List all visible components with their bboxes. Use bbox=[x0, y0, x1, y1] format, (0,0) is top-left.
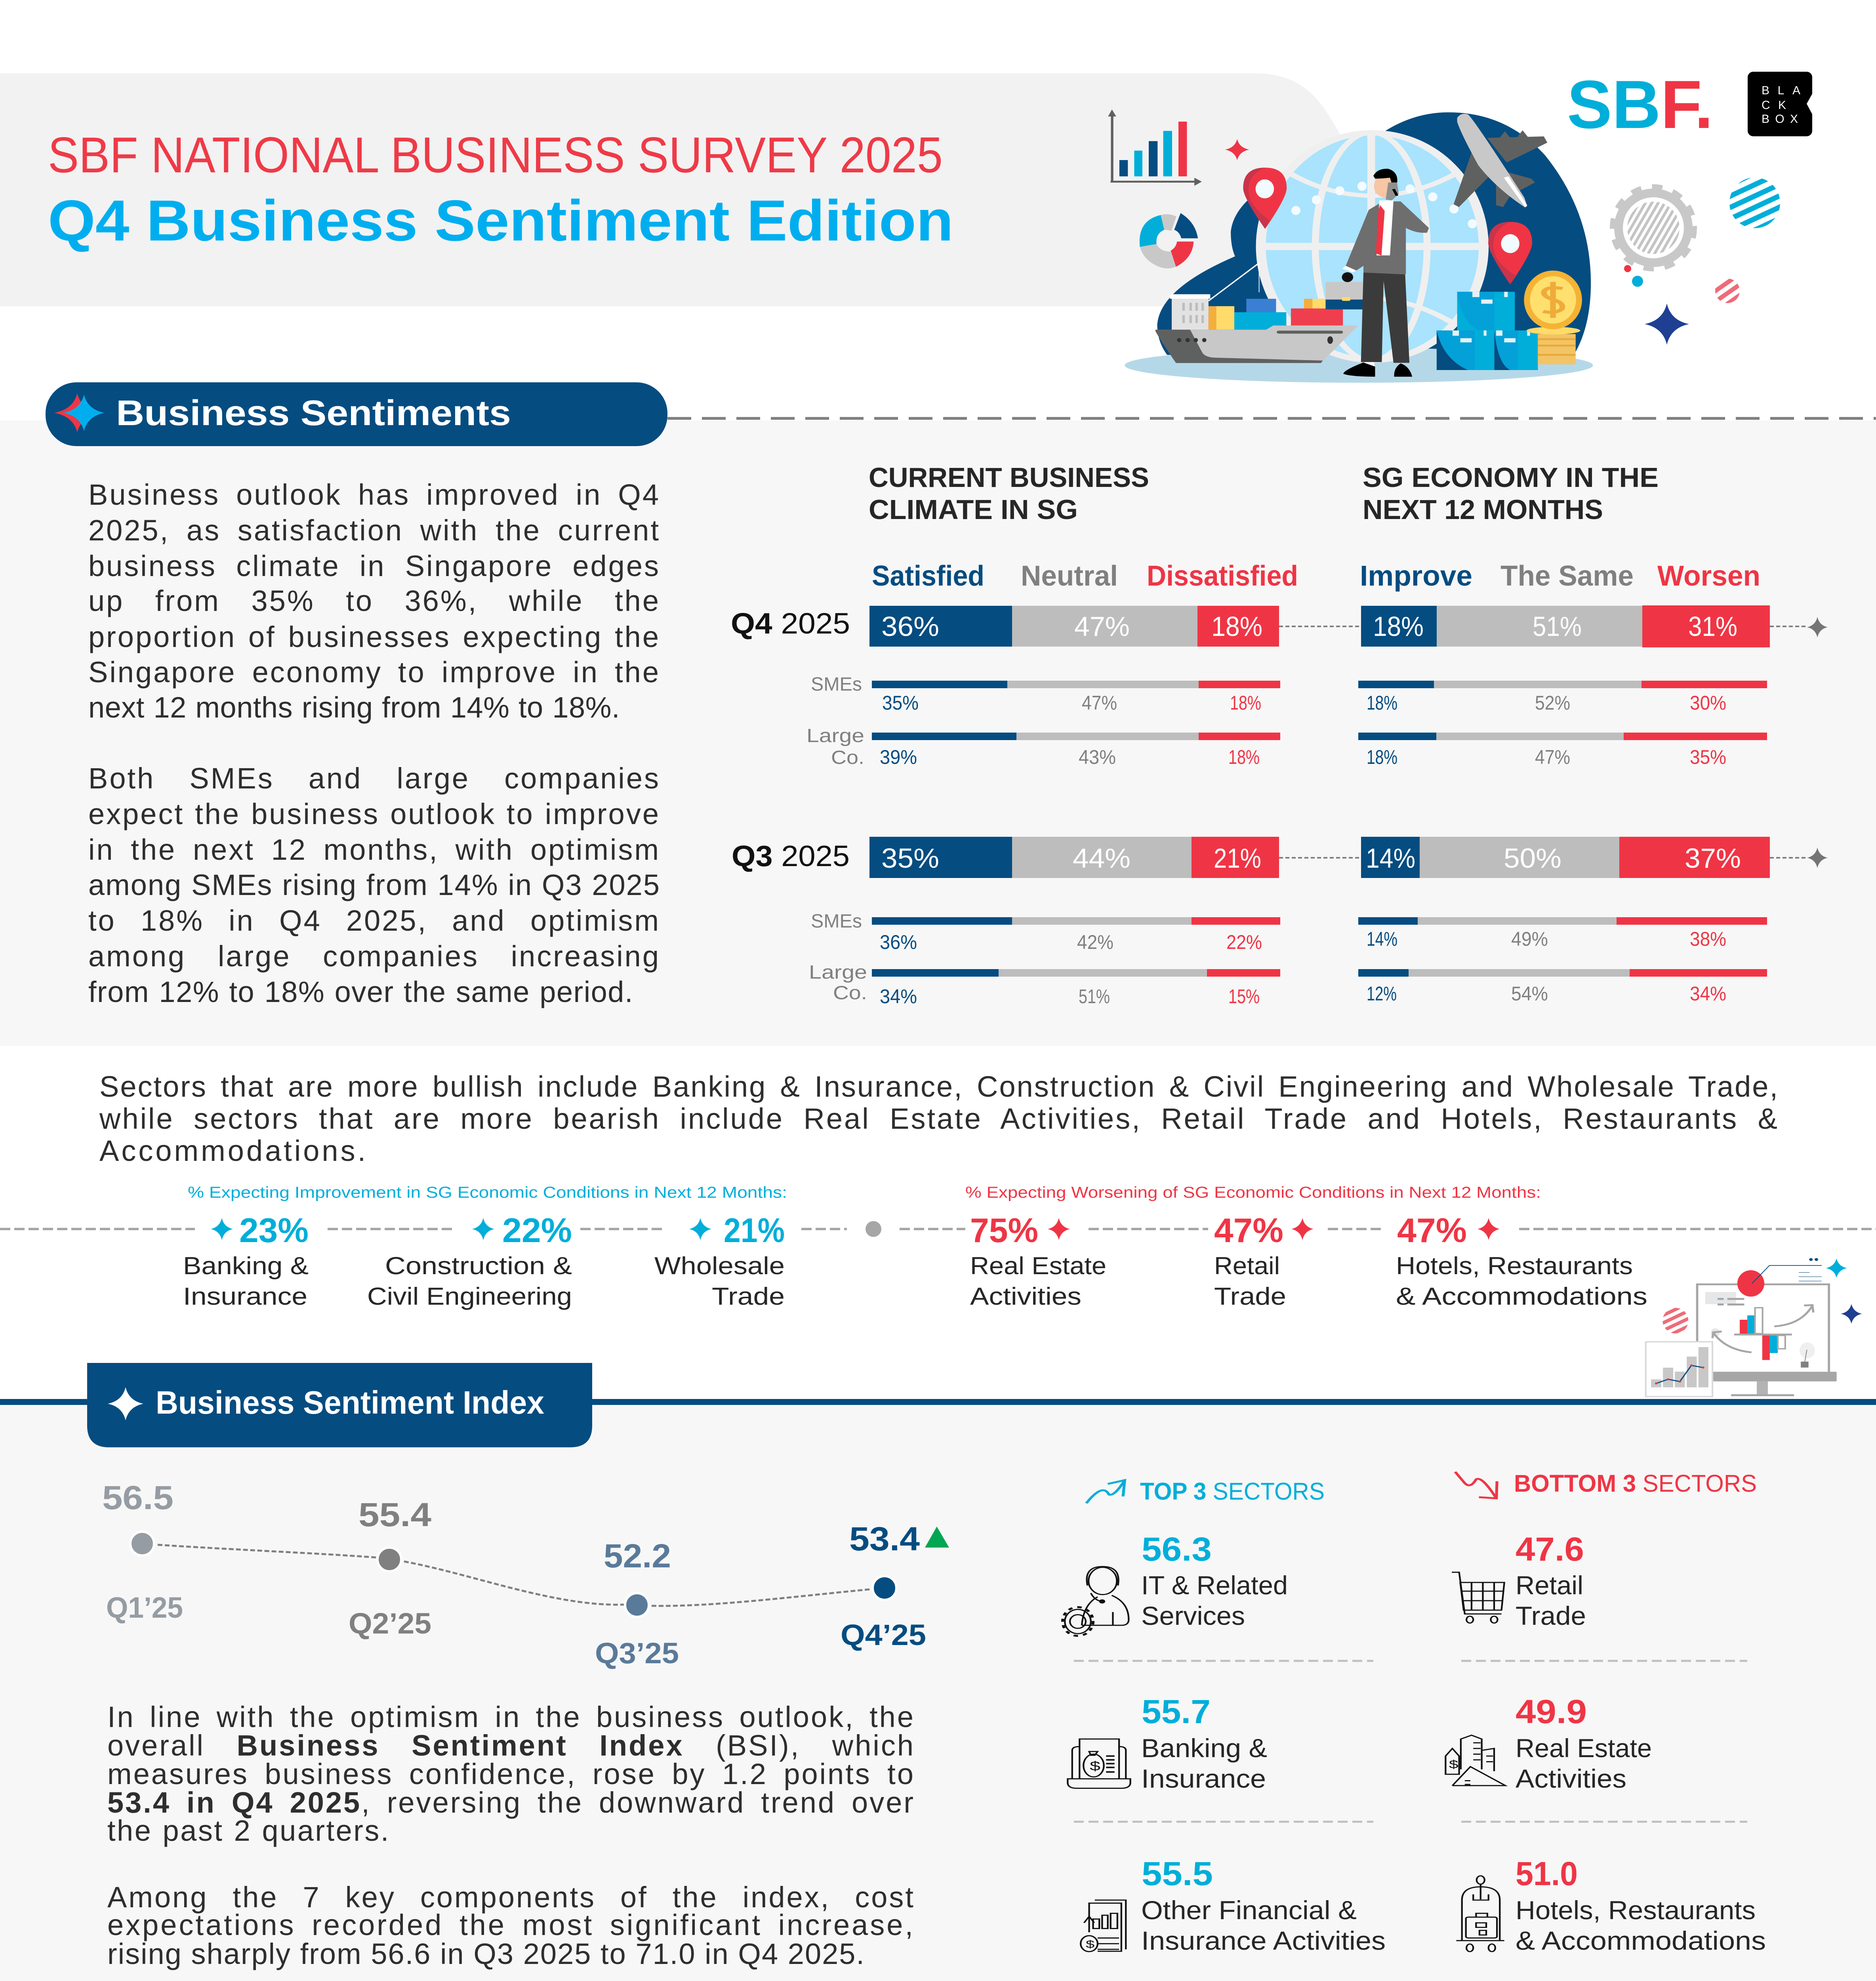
stat: Real Estate Activities: Activities bbox=[970, 1283, 1081, 1310]
row: Q3 Large Co.: 12% bbox=[1367, 983, 1397, 1005]
gear icon bbox=[1613, 187, 1694, 268]
bottom 3 sectors: 47.6 bbox=[1516, 1531, 1584, 1568]
bar: Q3 economy: 50% bbox=[1504, 843, 1561, 874]
icon: IT support bbox=[1063, 1567, 1129, 1636]
globe bbox=[1261, 133, 1485, 361]
bar: Q3 economy bbox=[1361, 837, 1770, 878]
legend: economy: The Same bbox=[1500, 560, 1634, 592]
column heading: current business climate: CLIMATE IN SG bbox=[869, 494, 1078, 525]
section background: business sentiments bbox=[0, 420, 1876, 1046]
title: SBF NATIONAL BUSINESS SURVEY 2025 bbox=[48, 127, 943, 183]
stat: Construction & Civil Engineering bbox=[367, 1212, 572, 1310]
hatched ball: cyan bbox=[1729, 177, 1780, 228]
row: Q4 SMEs: 47% bbox=[1082, 692, 1117, 714]
bar: Q3 current climate: 44% bbox=[1073, 843, 1131, 874]
row: Q3 SMEs: 22% bbox=[1226, 931, 1262, 953]
ground bbox=[1125, 348, 1593, 383]
legend: economy: Improve bbox=[1360, 560, 1472, 592]
row: Q3 Large Co.: Co. bbox=[833, 983, 867, 1004]
sparkle: navy bbox=[1645, 303, 1689, 345]
bar: Q4 current climate: 18% bbox=[1211, 611, 1262, 642]
connector and sparkle: Q3 bbox=[1770, 847, 1828, 868]
row: Q3 SMEs: 49% bbox=[1511, 928, 1548, 950]
top 3 sectors: 55.7 bbox=[1142, 1693, 1211, 1730]
dot: red bbox=[1624, 265, 1631, 272]
plane bbox=[1454, 114, 1547, 208]
stat: Wholesale Trade: Trade bbox=[712, 1283, 785, 1310]
briefcase bbox=[1325, 282, 1363, 309]
location pin left bbox=[1243, 168, 1287, 229]
stat: Retail Trade: 47% bbox=[1214, 1212, 1283, 1250]
cargo boxes bbox=[1437, 292, 1538, 370]
bottom 3 sectors: 49.9 bbox=[1516, 1693, 1587, 1730]
logo: Black Box: BLA bbox=[1762, 84, 1800, 97]
line chart: Business Sentiment Index: 56.5 bbox=[102, 1479, 173, 1516]
top 3 sectors: 56.3 bbox=[1142, 1531, 1212, 1568]
row: Q4 Large Co. bbox=[806, 725, 1767, 768]
row: Q4 Large Co.: 47% bbox=[1535, 746, 1570, 768]
top 3 sectors bbox=[1063, 1478, 1386, 1955]
row: Q4 SMEs bbox=[811, 674, 1767, 714]
bar: Q4 economy bbox=[1361, 605, 1770, 647]
column heading: SG economy bbox=[1363, 462, 1659, 525]
text block: BSI commentary: 53.4 in Q4 2025, reversing the downward trend over bbox=[107, 1786, 915, 1819]
row: Q3 SMEs: 38% bbox=[1690, 928, 1726, 950]
row: Q4 Large Co.: 39% bbox=[880, 746, 917, 768]
logo: SBF: SBF. bbox=[1567, 67, 1713, 143]
icon: banking laptop: $ bbox=[1090, 1759, 1100, 1773]
bottom 3 sectors: Trade bbox=[1516, 1601, 1586, 1630]
bar: Q3 current climate: 21% bbox=[1214, 843, 1261, 874]
row: Q3 SMEs: 36% bbox=[880, 931, 917, 953]
legend: current climate: Satisfied bbox=[872, 560, 984, 592]
text block: BSI commentary: overall Business Sentiment Index (BSI), which bbox=[107, 1729, 915, 1762]
connector and sparkle: Q4 bbox=[1770, 617, 1828, 637]
legend: current climate: Neutral bbox=[1021, 560, 1118, 592]
row label: Q3 2025: Q3 2025 bbox=[732, 840, 850, 872]
row: Q4 Large Co.: 18% bbox=[1367, 746, 1397, 768]
line chart: Business Sentiment Index: 55.4 bbox=[358, 1496, 431, 1533]
text block: business outlook: expect the business outlook to improve bbox=[88, 798, 660, 830]
text block: business outlook: next 12 months rising from 14% to 18%. bbox=[88, 691, 620, 724]
stat: Retail Trade bbox=[1214, 1212, 1314, 1310]
stat: Real Estate Activities bbox=[970, 1212, 1106, 1310]
navy divider line bbox=[0, 1399, 1876, 1405]
logo: Black Box: CK bbox=[1762, 99, 1786, 112]
text block: business outlook: Both SMEs and large companies bbox=[88, 762, 660, 795]
line chart: Business Sentiment Index: Q1’25 bbox=[106, 1591, 183, 1624]
row: Q3 SMEs: SMEs bbox=[811, 911, 862, 932]
bottom 3 sectors: Retail bbox=[1516, 1571, 1583, 1600]
top 3 sectors: Insurance Activities bbox=[1141, 1926, 1386, 1955]
red sparkle bbox=[1225, 139, 1249, 160]
bar: Q4 economy: 51% bbox=[1533, 611, 1582, 642]
line chart: Business Sentiment Index: Q2’25 bbox=[349, 1607, 431, 1640]
hatched ball: red bbox=[1715, 279, 1740, 303]
bar: Q4 current climate: 47% bbox=[1074, 611, 1130, 642]
row: Q4 SMEs: 35% bbox=[882, 692, 919, 714]
top 3 sectors: Services bbox=[1141, 1601, 1245, 1630]
line chart: Business Sentiment Index: 53.4 bbox=[849, 1520, 920, 1557]
bottom 3 sectors: & Accommodations bbox=[1516, 1926, 1766, 1955]
top 3 sectors: Other Financial & bbox=[1141, 1895, 1357, 1925]
connector: Q4 bbox=[1279, 626, 1361, 627]
text block: bullish and bearish sectors bbox=[99, 1067, 1779, 1171]
bottom 3 sectors: Activities bbox=[1516, 1764, 1626, 1793]
text block: bullish and bearish sectors: while sectors that are more bearish include Real Estate Activities, Retail Trade and Hotels, Restaurants & bbox=[99, 1102, 1779, 1135]
navy backdrop bbox=[1157, 112, 1591, 355]
header panel bbox=[0, 73, 1355, 306]
legend: economy bbox=[1360, 560, 1760, 592]
text block: bullish and bearish sectors: Accommodations. bbox=[99, 1134, 368, 1167]
gold coins bbox=[1524, 271, 1582, 365]
bottom 3 sectors: 51.0 bbox=[1516, 1855, 1578, 1892]
bar: Q4 current climate bbox=[869, 606, 1279, 647]
stat: Hotels, Restaurants & Accommodations: Hotels, Restaurants bbox=[1396, 1252, 1633, 1280]
subheading: improvement: % Expecting Improvement in SG Economic Conditions in Next 12 Months: bbox=[188, 1184, 787, 1201]
bar: Q3 current climate bbox=[869, 837, 1279, 878]
column heading: current business climate: CURRENT BUSINESS bbox=[869, 462, 1149, 493]
row: Q3 Large Co.: 54% bbox=[1511, 983, 1548, 1005]
stat: Construction & Civil Engineering: 22% bbox=[502, 1212, 572, 1250]
legend: current climate bbox=[872, 560, 1298, 592]
bar chart icon bbox=[1108, 109, 1202, 186]
text block: business outlook: from 12% to 18% over the same period. bbox=[88, 975, 633, 1008]
logo: Black Box: BOX bbox=[1762, 113, 1798, 126]
stat: Construction & Civil Engineering: Construction & bbox=[385, 1252, 572, 1280]
icon: trending down bbox=[1455, 1472, 1497, 1498]
column heading: SG economy: SG ECONOMY IN THE bbox=[1363, 462, 1659, 493]
icon: trending up bbox=[1086, 1480, 1125, 1503]
top 3 sectors: Insurance bbox=[1141, 1764, 1266, 1793]
title bbox=[48, 127, 953, 253]
text block: BSI commentary: expectations recorded the most significant increase, bbox=[107, 1908, 915, 1941]
legend: current climate: Dissatisfied bbox=[1147, 560, 1298, 592]
line chart: Business Sentiment Index: Q4’25 bbox=[841, 1618, 926, 1651]
text block: business outlook bbox=[88, 475, 660, 1012]
icon: banking laptop bbox=[1068, 1739, 1131, 1788]
connector: Q3 bbox=[1279, 857, 1361, 859]
bar: Q4 economy: 18% bbox=[1373, 611, 1424, 642]
text block: business outlook: Singapore economy to improve in the bbox=[88, 656, 660, 689]
bar: Q4 economy: 31% bbox=[1688, 611, 1737, 642]
row: Q4 Large Co.: 43% bbox=[1079, 746, 1116, 768]
stat: Hotels, Restaurants & Accommodations bbox=[1396, 1212, 1647, 1310]
stat: Banking & Insurance: 23% bbox=[239, 1212, 309, 1250]
row: Q3 Large Co.: Large bbox=[809, 962, 867, 983]
top 3 sectors: Banking & bbox=[1141, 1733, 1267, 1763]
dashed timeline bbox=[0, 1228, 1876, 1230]
icon: real estate bbox=[1445, 1735, 1506, 1786]
row: Q3 SMEs: 42% bbox=[1077, 931, 1113, 953]
top 3 sectors: IT & Related bbox=[1141, 1571, 1288, 1600]
row: Q4 Large Co.: Large bbox=[806, 725, 864, 746]
row: Q3 Large Co.: 15% bbox=[1228, 985, 1260, 1008]
bottom 3 sectors: Hotels, Restaurants bbox=[1516, 1895, 1756, 1925]
icon: financial document: $ bbox=[1086, 1939, 1094, 1950]
stat: Banking & Insurance: Banking & bbox=[183, 1252, 309, 1280]
row: Q3 SMEs: 14% bbox=[1367, 928, 1397, 950]
text block: BSI commentary: In line with the optimism in the business outlook, the bbox=[107, 1700, 915, 1733]
row: Q3 Large Co.: 34% bbox=[880, 985, 917, 1008]
top 3 sectors: 55.5 bbox=[1142, 1855, 1213, 1892]
stat: Retail Trade: Retail bbox=[1214, 1252, 1280, 1280]
stat: Banking & Insurance: Insurance bbox=[183, 1283, 307, 1310]
heading: Business Sentiments bbox=[46, 382, 667, 446]
stat: Real Estate Activities: Real Estate bbox=[970, 1252, 1106, 1280]
text block: business outlook: proportion of businesses expecting the bbox=[88, 620, 660, 653]
title: Q4 Business Sentiment Edition bbox=[48, 188, 953, 253]
stat: Hotels, Restaurants & Accommodations: 47% bbox=[1397, 1212, 1467, 1250]
line chart: Business Sentiment Index bbox=[102, 1479, 949, 1670]
row: Q3 SMEs bbox=[811, 911, 1767, 953]
heading: Business Sentiment Index: Business Sentiment Index bbox=[156, 1385, 544, 1421]
bottom 3 sectors: BOTTOM 3 SECTORS bbox=[1514, 1470, 1757, 1497]
location pin right bbox=[1488, 222, 1532, 284]
row: Q4 SMEs: 18% bbox=[1367, 692, 1397, 714]
icon: financial document bbox=[1081, 1900, 1126, 1952]
top 3 sectors: TOP 3 SECTORS bbox=[1140, 1478, 1325, 1505]
line chart: Business Sentiment Index: 52.2 bbox=[604, 1537, 671, 1574]
bar: Q3 current climate: 35% bbox=[881, 843, 939, 874]
icon: hotel luggage cart bbox=[1456, 1876, 1504, 1952]
bottom 3 sectors: Real Estate bbox=[1516, 1733, 1652, 1763]
text block: business outlook: in the next 12 months, with optimism bbox=[88, 833, 660, 866]
heading: Business Sentiments: Business Sentiments bbox=[116, 393, 511, 433]
cargo ship bbox=[1155, 263, 1358, 363]
row label: Q4 2025: Q4 2025 bbox=[731, 607, 850, 640]
column heading: current business climate bbox=[869, 462, 1149, 525]
heading: Business Sentiment Index bbox=[87, 1363, 592, 1447]
text block: BSI commentary: Among the 7 key components of the index, cost bbox=[107, 1881, 915, 1914]
text block: business outlook: up from 35% to 36%, while the bbox=[88, 584, 660, 617]
text block: business outlook: 2025, as satisfaction with the current bbox=[88, 514, 660, 547]
text block: business outlook: business climate in Singapore edges bbox=[88, 550, 660, 582]
stat: Wholesale Trade: 21% bbox=[724, 1212, 785, 1250]
text block: business outlook: to 18% in Q4 2025, and optimism bbox=[88, 904, 660, 937]
logo: Black Box bbox=[1748, 72, 1813, 136]
row: Q4 SMEs: SMEs bbox=[811, 674, 862, 695]
bar: Q3 economy: 14% bbox=[1366, 843, 1415, 874]
dashed divider bbox=[667, 417, 1876, 420]
subheading: worsening: % Expecting Worsening of SG Economic Conditions in Next 12 Months: bbox=[965, 1184, 1541, 1201]
text block: BSI commentary: measures business confidence, rose by 1.2 points to bbox=[107, 1758, 915, 1790]
row: Q3 Large Co. bbox=[809, 962, 1767, 1008]
illustration: analytics monitor bbox=[1646, 1258, 1862, 1397]
section background: business sentiment index bbox=[0, 1405, 1876, 1981]
timeline dot bbox=[866, 1221, 881, 1237]
row: Q3 Large Co.: 34% bbox=[1690, 983, 1726, 1005]
stat: Retail Trade: Trade bbox=[1214, 1283, 1286, 1310]
dot: cyan bbox=[1632, 276, 1643, 287]
row: Q4 SMEs: 18% bbox=[1230, 692, 1261, 714]
bar: Q4 current climate: 36% bbox=[881, 611, 939, 642]
bar: Q3 economy: 37% bbox=[1685, 843, 1741, 874]
text block: BSI commentary: rising sharply from 56.6 in Q3 2025 to 71.0 in Q4 2025. bbox=[107, 1937, 865, 1970]
row: Q4 SMEs: 52% bbox=[1535, 692, 1570, 714]
text block: BSI commentary: the past 2 quarters. bbox=[107, 1814, 390, 1847]
icon: real estate: $ bbox=[1449, 1758, 1458, 1771]
text block: business outlook: among large companies increasing bbox=[88, 940, 660, 973]
stat: Real Estate Activities: 75% bbox=[970, 1212, 1038, 1250]
text block: business outlook: among SMEs rising from 14% in Q3 2025 bbox=[88, 868, 660, 901]
stat: Hotels, Restaurants & Accommodations: & Accommodations bbox=[1396, 1283, 1647, 1310]
bottom 3 sectors bbox=[1445, 1470, 1766, 1955]
row: Q3 Large Co.: 51% bbox=[1079, 985, 1110, 1008]
text block: business outlook: Business outlook has improved in Q4 bbox=[88, 478, 660, 511]
stat: Wholesale Trade bbox=[654, 1212, 785, 1310]
header illustration: globe, businessman, ship, plane bbox=[1108, 109, 1593, 383]
icon: shopping cart bbox=[1452, 1572, 1504, 1623]
line chart: Business Sentiment Index: Q3’25 bbox=[595, 1637, 679, 1670]
row: Q4 Large Co.: Co. bbox=[831, 747, 864, 768]
donut chart icon bbox=[1140, 213, 1198, 269]
stat: Wholesale Trade: Wholesale bbox=[654, 1252, 785, 1280]
businessman bbox=[1342, 169, 1429, 377]
column heading: SG economy: NEXT 12 MONTHS bbox=[1363, 494, 1603, 525]
row: Q4 Large Co.: 18% bbox=[1228, 746, 1260, 768]
text block: bullish and bearish sectors: Sectors that are more bullish include Banking & Insurance, Construction & Civil Engineering and Wholesale Trade, bbox=[99, 1070, 1779, 1103]
stat: Banking & Insurance bbox=[183, 1212, 309, 1310]
legend: economy: Worsen bbox=[1657, 560, 1760, 592]
row: Q4 SMEs: 30% bbox=[1690, 692, 1726, 714]
text block: BSI commentary bbox=[107, 1697, 915, 1974]
stat: Construction & Civil Engineering: Civil Engineering bbox=[367, 1283, 572, 1310]
row: Q4 Large Co.: 35% bbox=[1690, 746, 1726, 768]
